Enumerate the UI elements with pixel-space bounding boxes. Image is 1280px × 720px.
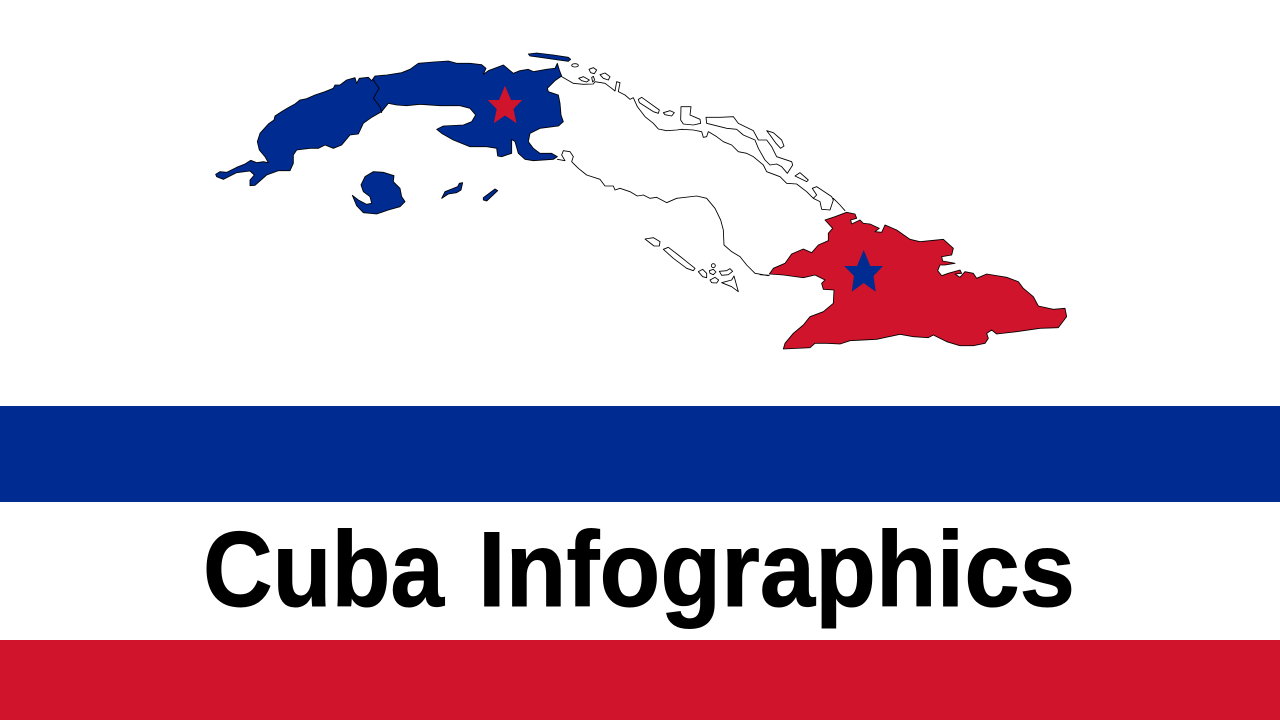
- icon: blue star: [844, 250, 883, 292]
- map: central region in white outline: [557, 64, 845, 292]
- title: Cuba: [203, 509, 445, 629]
- icon: red star: [488, 86, 522, 123]
- blue band: [0, 406, 1280, 502]
- title: Infographics: [478, 509, 1075, 629]
- map: western region in blue: [216, 53, 571, 214]
- map of Cuba: [216, 53, 1067, 349]
- red band: [0, 640, 1280, 720]
- map: eastern region in red: [760, 212, 1067, 349]
